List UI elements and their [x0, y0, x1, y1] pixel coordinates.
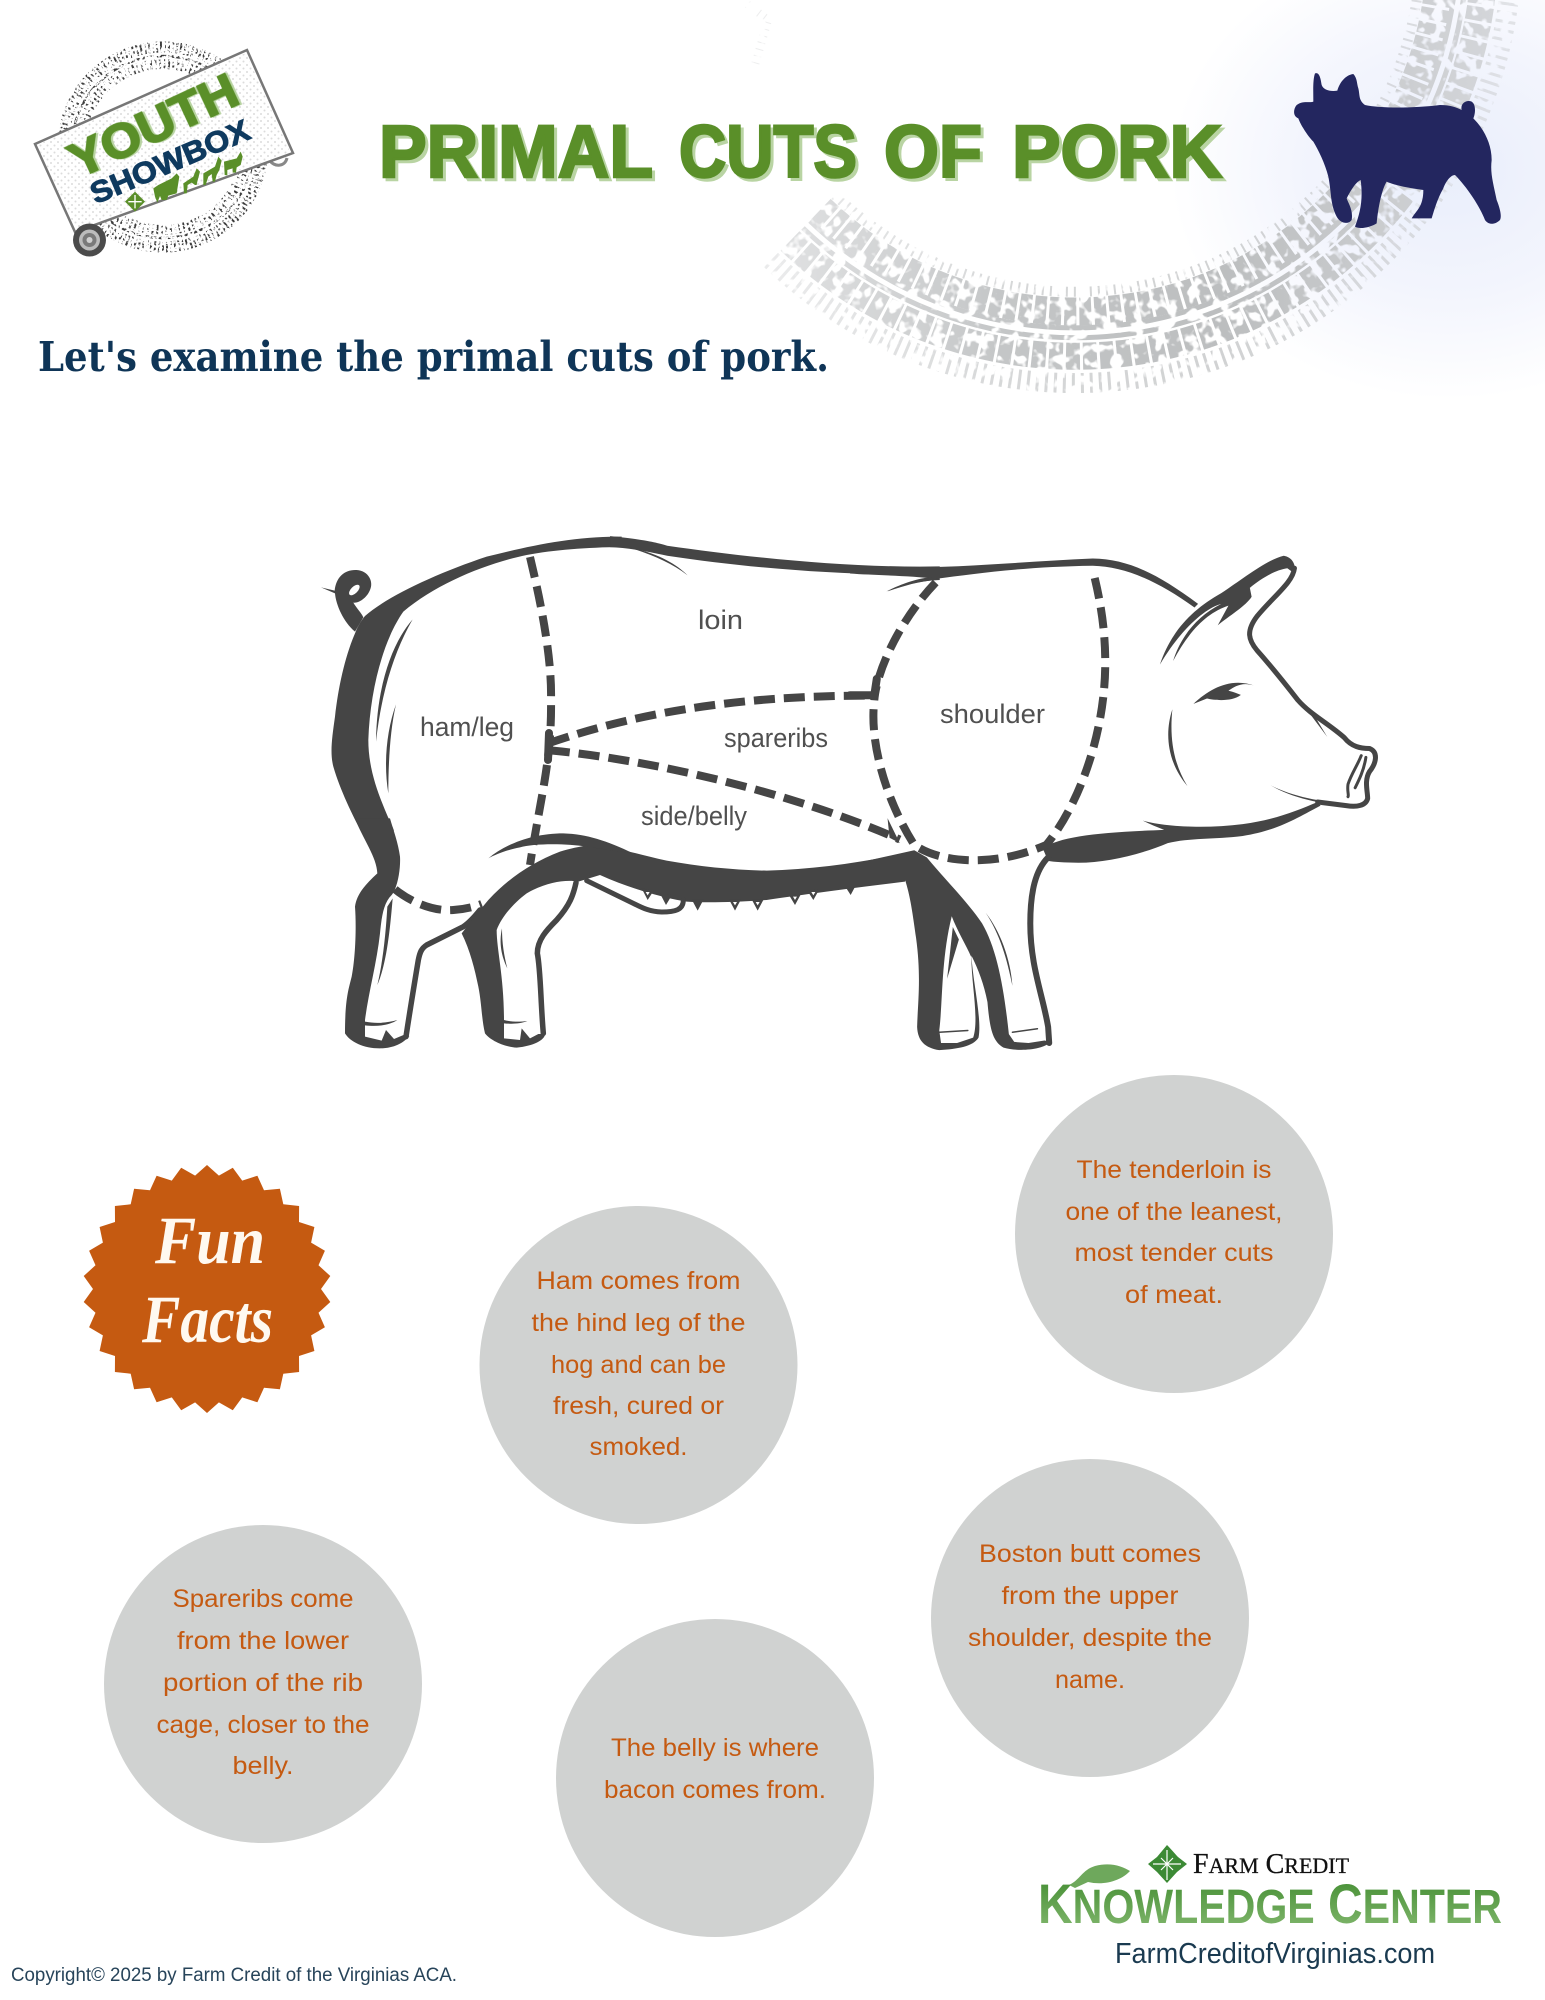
rib cut lines: [549, 696, 875, 743]
title: PRIMAL: [379, 110, 653, 193]
logo: Farm Credit Knowledge Center: KNOWLEDGE CENTER: [1038, 1872, 1502, 1935]
back outline: [850, 559, 1198, 607]
background glow: [1170, 0, 1545, 400]
fact: spareribs: from the lower: [177, 1627, 349, 1655]
fact: tenderloin: The tenderloin is: [1076, 1156, 1272, 1184]
copyright: Copyright© 2025 by Farm Credit of the Virginias ACA.: [11, 1965, 457, 1986]
pig diagram: ham/leg: [420, 712, 514, 742]
near hind leg: [345, 818, 409, 1048]
subtitle: Let's examine the primal cuts of pork.: [38, 333, 829, 381]
cheek: [1168, 709, 1187, 786]
front legs: [850, 850, 1051, 1050]
fact: ham: fresh, cured or: [553, 1392, 724, 1420]
fact: belly: [556, 1619, 874, 1937]
pig diagram: spareribs: [724, 723, 828, 753]
fact: ham: hog and can be: [551, 1351, 726, 1379]
logo: Farm Credit Knowledge Center: [1038, 1845, 1502, 1970]
belly and far hind leg: [462, 845, 913, 1048]
fact: boston butt: Boston butt comes: [979, 1540, 1201, 1568]
logo: Farm Credit Knowledge Center: FarmCreditofVirginias.com: [1115, 1938, 1435, 1970]
fact: tenderloin: [1015, 1075, 1333, 1393]
fact: ham: smoked.: [590, 1433, 688, 1461]
eye: [1193, 683, 1255, 704]
title: CUTS: [679, 110, 857, 193]
logo: Youth Showbox: [35, 47, 293, 256]
fact: boston butt: name.: [1055, 1666, 1125, 1694]
ham cut line: [530, 557, 551, 865]
fact: tenderloin: of meat.: [1125, 1281, 1223, 1309]
pig front half: [850, 556, 1375, 1050]
tail: [321, 570, 371, 632]
rump outline: [332, 537, 622, 831]
logo: Youth Showbox: YOUTH: [61, 64, 246, 188]
pig diagram: side/belly: [641, 801, 747, 831]
neck underside: [1043, 802, 1321, 863]
fact: spareribs: cage, closer to the: [156, 1711, 370, 1739]
fact: ham: the hind leg of the: [532, 1309, 746, 1337]
fact: ham: Ham comes from: [536, 1267, 740, 1295]
pig mid section: [549, 536, 940, 843]
cut labels: loin: [698, 605, 743, 635]
fact: belly: bacon comes from.: [604, 1776, 826, 1804]
leg cut line: [395, 889, 482, 910]
pig rump and tail: [321, 537, 622, 831]
fact: tenderloin: most tender cuts: [1074, 1239, 1274, 1267]
fact: spareribs: portion of the rib: [163, 1669, 363, 1697]
title: [379, 110, 1222, 193]
fact: spareribs: [104, 1525, 422, 1843]
title: OF: [884, 110, 982, 193]
fact: boston butt: [931, 1459, 1249, 1777]
icon: show animals: [125, 152, 243, 212]
belly loop: [587, 881, 683, 912]
pig diagram: shoulder: [940, 699, 1045, 729]
head outline: [1250, 568, 1375, 806]
badge: fun facts: [84, 1165, 330, 1413]
fact: ham: [480, 1206, 798, 1524]
tire track background: [742, 0, 1512, 383]
fact: spareribs: belly.: [232, 1752, 294, 1780]
pig diagram: [321, 536, 1375, 1050]
snout: [1348, 756, 1366, 797]
teats: [642, 885, 856, 911]
rib junction: [548, 733, 549, 760]
fact: boston butt: from the upper: [1002, 1582, 1178, 1610]
fact: boston butt: shoulder, despite the: [968, 1624, 1212, 1652]
badge: fun facts: Fun: [154, 1202, 265, 1278]
shoulder cut lines: [874, 582, 936, 700]
logo: Farm Credit Knowledge Center: FARM CREDIT: [1193, 1849, 1350, 1880]
fact: spareribs: Spareribs come: [172, 1585, 354, 1613]
fact: belly: The belly is where: [611, 1734, 819, 1762]
shoulder outline: [887, 577, 936, 591]
icon: navy pig silhouette: [1294, 73, 1501, 228]
ham crescents: [376, 619, 413, 742]
badge: fun facts: Facts: [141, 1281, 273, 1357]
fact: tenderloin: one of the leanest,: [1066, 1198, 1282, 1226]
flank crescent: [488, 833, 633, 858]
icon: leaf: [1069, 1864, 1130, 1888]
logo: Youth Showbox: SHOWBOX: [86, 114, 255, 211]
ear: [1160, 556, 1295, 665]
back outline: [610, 536, 940, 575]
icon: trailer wheel: [73, 224, 106, 256]
jaw: [1271, 785, 1350, 806]
icon: clover diamond: [1148, 1845, 1187, 1883]
title: PORK: [1012, 110, 1222, 193]
hind legs and belly: [345, 818, 913, 1048]
